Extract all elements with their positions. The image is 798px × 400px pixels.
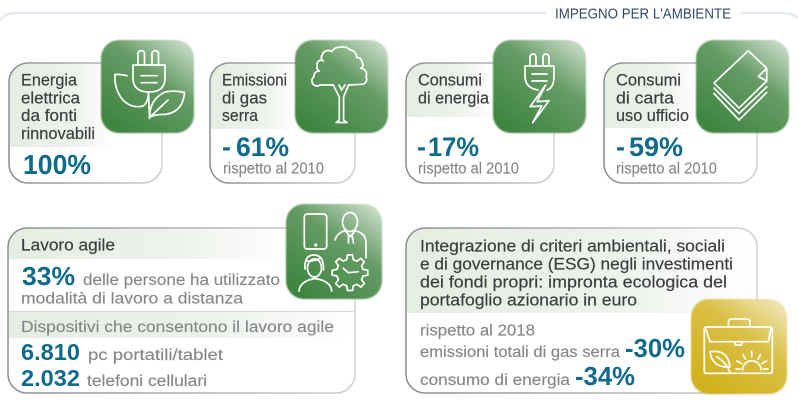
heading: ESG integration: e di governance (ESG) negli investimenti: [420, 256, 733, 274]
icon: briefcase with leaf and sun: [691, 299, 787, 394]
value: -17%: 17%: [428, 132, 479, 162]
stat: laptops: 6.810: [21, 339, 80, 365]
stat: 33%: 33%: [22, 261, 75, 291]
label: greenhouse emissions: Emissioni: [222, 72, 287, 90]
label: greenhouse emissions: [222, 72, 287, 125]
stat: laptops: [21, 339, 224, 365]
note: rispetto al 2018: [420, 323, 535, 340]
heading: devices: Dispositivi che consentono il lavoro agile: [21, 319, 334, 336]
value: -59%: 59%: [629, 132, 683, 162]
icon: tablet, people and clock gear: [286, 204, 382, 299]
note: rispetto al 2010: [418, 160, 519, 178]
stat: total greenhouse emissions: emissioni totali di gas serra: [420, 344, 620, 361]
label: office paper consumption: uso ufficio: [616, 107, 689, 125]
label: greenhouse emissions: di gas: [222, 89, 267, 107]
note: rispetto al 2010: [616, 160, 717, 178]
label: greenhouse emissions: serra: [222, 107, 259, 125]
stat: 33%: modalità di lavoro a distanza: [21, 291, 243, 308]
label: office paper consumption: Consumi: [616, 72, 681, 90]
label: renewable electricity: da fonti: [21, 107, 77, 125]
label: energy consumption: di energia: [418, 89, 490, 107]
label: office paper consumption: di carta: [616, 89, 675, 107]
panel: office paper consumption: [604, 40, 789, 183]
panel: greenhouse emissions: [210, 40, 388, 183]
stat: 33%: delle persone ha utilizzato: [83, 272, 280, 289]
label: renewable electricity: [21, 72, 95, 143]
label: office paper consumption: [616, 72, 689, 125]
panel: renewable electricity: [9, 40, 194, 183]
label: renewable electricity: rinnovabili: [21, 125, 95, 143]
stat: phones: 2.032: [21, 365, 80, 391]
icon: paper stack: [696, 40, 789, 133]
stat: 33%: [21, 261, 280, 308]
stat: energy consumption: [420, 361, 635, 391]
heading: ESG integration: dei fondi propri: impronta ecologica del: [420, 274, 727, 292]
label: energy consumption: [418, 72, 490, 107]
title: IMPEGNO PER L'AMBIENTE: [555, 6, 731, 22]
stat: energy consumption: -34%: [575, 361, 635, 391]
value: 100%: 100%: [23, 149, 91, 180]
icon: plug with leaf: [101, 40, 194, 133]
panel: ESG integration: [406, 228, 787, 394]
panel: smart working: [8, 204, 382, 393]
heading: ESG integration: Integrazione di criteri ambientali, sociali: [420, 238, 725, 256]
label: renewable electricity: Energia: [21, 72, 78, 90]
value: -61%: 61%: [236, 132, 289, 162]
icon: tree: [295, 40, 388, 133]
icon: plug with lightning bolt: [493, 40, 586, 133]
stat: phones: [21, 365, 207, 391]
value: -59%: -: [616, 132, 625, 162]
stat: total greenhouse emissions: -30%: [625, 333, 685, 363]
heading: smart working: Lavoro agile: [21, 237, 115, 255]
note: rispetto al 2010: [223, 160, 324, 178]
value: -17%: -: [417, 132, 426, 162]
stat: energy consumption: consumo di energia: [420, 372, 570, 389]
stat: phones: telefoni cellulari: [87, 373, 207, 390]
panel: energy consumption: [406, 40, 586, 183]
heading: ESG integration: portafoglio azionario in euro: [420, 292, 637, 310]
value: -61%: -: [222, 132, 231, 162]
heading: ESG integration: [420, 238, 733, 310]
stat: total greenhouse emissions: [420, 333, 685, 363]
stat: laptops: pc portatili/tablet: [88, 347, 224, 364]
label: renewable electricity: elettrica: [21, 89, 81, 107]
label: energy consumption: Consumi: [418, 72, 482, 90]
title rule: [0, 13, 798, 21]
